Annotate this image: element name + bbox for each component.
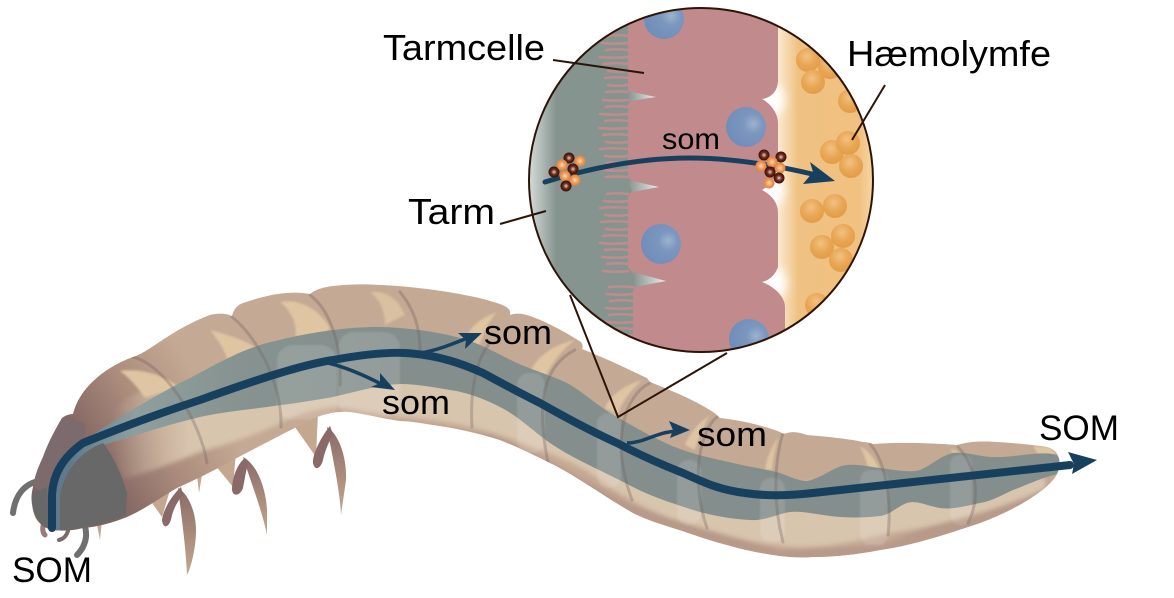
haemolymph — [774, 28, 872, 329]
icon: particles crossing cell — [756, 150, 786, 188]
head grey dome — [32, 443, 127, 531]
arrow: nutrient transport — [545, 158, 835, 184]
arrow: branch downward — [328, 363, 395, 390]
magnified circle: gut cross-section — [529, 0, 874, 359]
arrow: branch right — [627, 421, 690, 443]
cell junction spikes — [628, 91, 656, 101]
darker underside — [404, 421, 1050, 558]
icon: leg two — [232, 457, 267, 535]
label: som right: som — [697, 416, 767, 454]
body segments — [32, 284, 1060, 557]
icon: hind small legs — [96, 412, 318, 540]
translucent inner segment patches — [277, 332, 972, 545]
label: SOM out: SOM — [1039, 409, 1119, 448]
icon: leg one — [162, 487, 196, 575]
microvilli — [599, 35, 633, 336]
gut lumen — [530, 26, 635, 337]
white glow at cell junctions — [770, 82, 792, 300]
label: Tarm: Tarm — [408, 191, 495, 232]
gut band — [48, 327, 1062, 530]
icon: particles in gut — [548, 152, 586, 192]
label: Tarmcelle: Tarmcelle — [383, 27, 545, 68]
label: som upper: som — [484, 314, 552, 352]
head plate — [33, 417, 86, 495]
icon: haemocyte spheres — [796, 48, 863, 317]
icon: antennae and mouthparts — [13, 481, 86, 555]
light lower band — [120, 384, 1048, 548]
label: SOM in: SOM — [12, 551, 92, 590]
arrow: main gut path — [52, 353, 1097, 528]
zoom callout lines — [570, 295, 727, 417]
arrow: branch upward — [420, 333, 482, 353]
leader line: Tarm — [500, 211, 546, 224]
label: som in circle: som — [662, 123, 720, 156]
upper highlight patches — [120, 292, 1057, 470]
label: som lower: som — [382, 384, 450, 422]
centipede illustration — [13, 284, 1097, 575]
leader line: Tarmcelle — [553, 60, 644, 73]
intestinal cells — [628, 8, 785, 352]
icon: cell nuclei — [641, 0, 769, 359]
segment ribs — [133, 292, 975, 542]
icon: leg three — [313, 426, 346, 515]
leader line: Hæmolymfe — [852, 85, 885, 140]
label: Hæmolymfe: Hæmolymfe — [847, 33, 1051, 74]
